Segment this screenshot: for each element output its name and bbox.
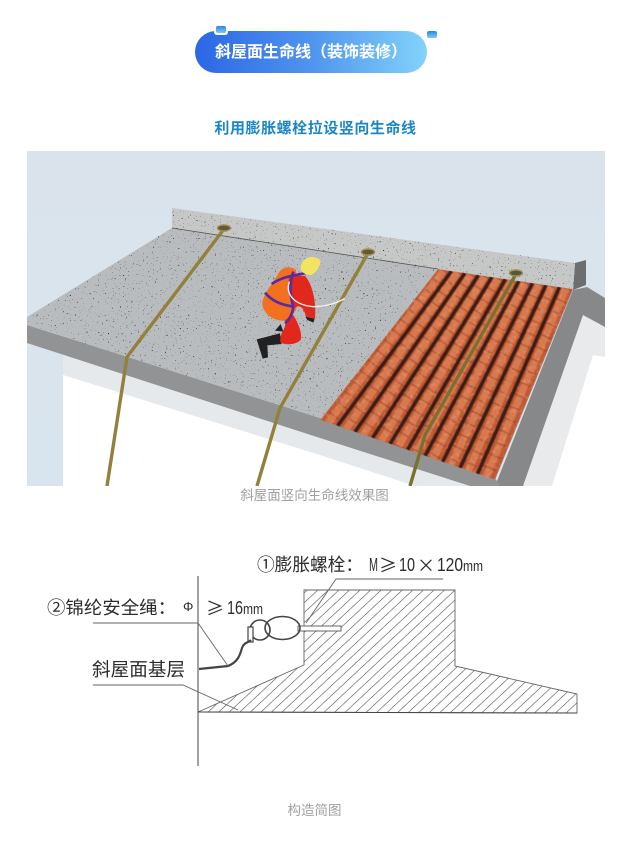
gable shadow — [523, 315, 605, 486]
subtitle: 利用膨胀螺栓拉设竖向生命线 — [214, 120, 417, 137]
safety rope 1 — [107, 229, 224, 486]
expansion bolt — [298, 626, 341, 631]
hand — [305, 317, 315, 323]
label: expansion bolt: 10 — [399, 555, 415, 575]
label: nylon rope — [47, 595, 263, 621]
label: roof base layer: 斜屋面基层 — [92, 659, 185, 680]
concrete speckle — [28, 210, 574, 476]
hatched parapet section — [198, 590, 577, 713]
centre line — [197, 576, 199, 766]
title pill — [195, 31, 427, 73]
label: nylon rope: mm — [243, 601, 263, 618]
leader line: rope — [93, 623, 228, 666]
label: nylon rope: ≥ — [206, 595, 224, 621]
label: expansion bolt: mm — [463, 558, 483, 575]
roof concrete surface — [27, 228, 573, 480]
parapet side — [573, 260, 586, 290]
label: expansion bolt: ①膨胀螺栓： — [257, 555, 363, 575]
gable edge — [495, 287, 605, 486]
clay tiles — [318, 265, 576, 483]
harness — [265, 272, 305, 323]
anchor ring 2 — [362, 249, 374, 255]
helmet — [301, 257, 320, 275]
leader line: base layer — [93, 685, 238, 710]
decorative square left — [214, 25, 228, 35]
sky background — [27, 151, 605, 486]
label: expansion bolt: × — [417, 552, 435, 578]
boot — [257, 333, 282, 359]
base line — [198, 712, 577, 713]
parapet base line — [172, 228, 438, 269]
orange torso — [262, 267, 297, 321]
title pill: 斜屋面生命线（装饰装修） — [215, 44, 407, 61]
clasp — [248, 627, 253, 642]
anchor ring 1 — [218, 225, 230, 231]
leader line: bolt — [306, 579, 443, 623]
safety rope 3 — [410, 274, 516, 486]
worker — [257, 257, 345, 359]
label: nylon rope: ②锦纶安全绳： — [47, 598, 176, 618]
photo caption: 斜屋面竖向生命线效果图 — [240, 488, 389, 503]
label: expansion bolt: M — [369, 555, 378, 575]
wall shadow under eave — [63, 343, 470, 486]
roof fascia — [27, 325, 500, 486]
label: expansion bolt: 120 — [437, 555, 463, 575]
house wall — [63, 355, 605, 486]
lanyard — [288, 282, 345, 307]
label: nylon rope: Φ — [183, 599, 193, 614]
nylon rope — [199, 640, 251, 669]
red arm — [289, 275, 315, 319]
red leg — [280, 315, 301, 344]
carabiner ring — [250, 620, 270, 640]
label: expansion bolt — [257, 552, 483, 578]
bolt eye ring — [265, 616, 300, 640]
label: nylon rope: 16 — [227, 598, 243, 618]
safety rope 2 — [257, 253, 368, 486]
decorative square right — [427, 31, 437, 38]
diagram caption: 构造简图 — [288, 803, 342, 818]
construction diagram — [47, 552, 578, 766]
title badge — [195, 26, 437, 73]
anchor ring 3 — [510, 270, 522, 276]
label: expansion bolt: ≥ — [379, 552, 397, 578]
roof illustration — [27, 151, 605, 486]
parapet face — [172, 208, 575, 290]
